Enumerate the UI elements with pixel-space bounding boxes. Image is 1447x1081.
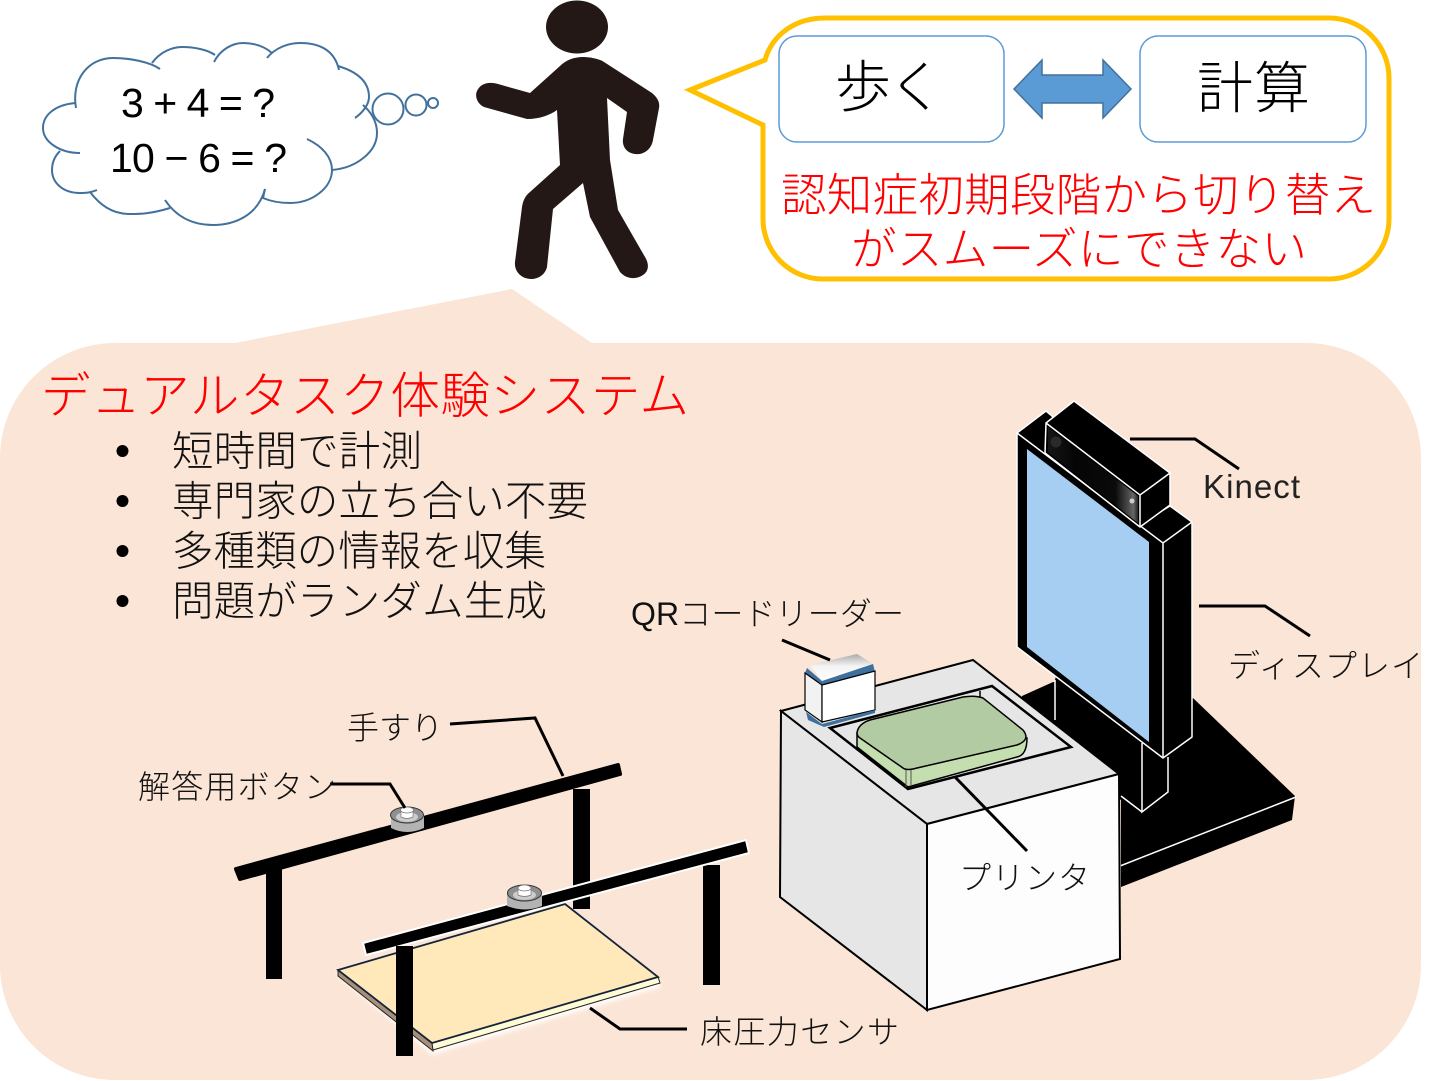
- icon: thought bubbles: [372, 94, 438, 124]
- thought cloud with arithmetic: [43, 43, 438, 225]
- arrow: bidirectional: [1014, 60, 1131, 118]
- label: Kinect: [1130, 439, 1300, 505]
- QR code reader: [805, 654, 875, 727]
- panel: dual task system background: [0, 289, 1421, 1080]
- feature list: [116, 428, 588, 624]
- label: display: [1199, 606, 1423, 684]
- answer button: front: [507, 885, 542, 910]
- text: red message: 認知症初期段階から切り替え: [781, 170, 1376, 221]
- answer button: back: [390, 807, 424, 832]
- feature list: 専門家の立ち合い不要: [172, 478, 588, 524]
- base plate: [1022, 682, 1296, 887]
- white box: [780, 660, 1120, 1010]
- box: calculation: 計算: [1197, 57, 1310, 120]
- icon: walking person: [476, 0, 659, 279]
- box: calculation: [1140, 36, 1366, 142]
- label: printer: [955, 777, 1090, 896]
- bubble outline: [690, 18, 1389, 279]
- label: answer button: [138, 769, 405, 808]
- screen: [1027, 449, 1149, 742]
- display with stand: [1017, 411, 1192, 812]
- label: QR code reader: [631, 596, 904, 660]
- text: 3 + 4 = ?: 3 + 4 = ?: [121, 80, 275, 126]
- text: 10 − 6 = ?: 10 − 6 = ?: [110, 135, 287, 181]
- title: デュアルタスク体験システム: [41, 369, 689, 424]
- feature list: 問題がランダム生成: [172, 578, 547, 624]
- recess: [830, 686, 1071, 789]
- label: floor pressure sensor: [590, 1008, 899, 1050]
- display body: [1017, 411, 1192, 758]
- label: floor pressure sensor: 床圧力センサ: [700, 1014, 899, 1050]
- label: handrail: 手すり: [347, 710, 443, 746]
- box: walking: [779, 36, 1004, 142]
- floor pressure sensor: [338, 904, 660, 1051]
- feature list: 多種類の情報を収集: [172, 528, 546, 574]
- text: red message: [781, 170, 1376, 275]
- feature list: 短時間で計測: [172, 428, 422, 474]
- box left face: [780, 711, 927, 1010]
- box right face: [927, 774, 1120, 1010]
- label: display: ディスプレイ: [1228, 648, 1423, 684]
- label: answer button: 解答用ボタン: [138, 769, 336, 805]
- stand: [1055, 660, 1168, 812]
- handrail: back: [236, 765, 620, 979]
- speech bubble: [690, 18, 1389, 279]
- box: walking: 歩く: [835, 56, 944, 119]
- label: QR code reader: QRコードリーダー: [631, 596, 904, 632]
- label: printer: プリンタ: [959, 860, 1090, 896]
- kinect: [1045, 401, 1170, 527]
- label: Kinect: Kinect: [1203, 468, 1300, 505]
- text: red message: がスムーズにできない: [851, 224, 1307, 275]
- handrail: front: [363, 840, 749, 1056]
- printer: [857, 691, 1027, 787]
- icon: cloud outline: [43, 43, 377, 225]
- label: handrail: [347, 710, 563, 776]
- box top: [781, 660, 1119, 824]
